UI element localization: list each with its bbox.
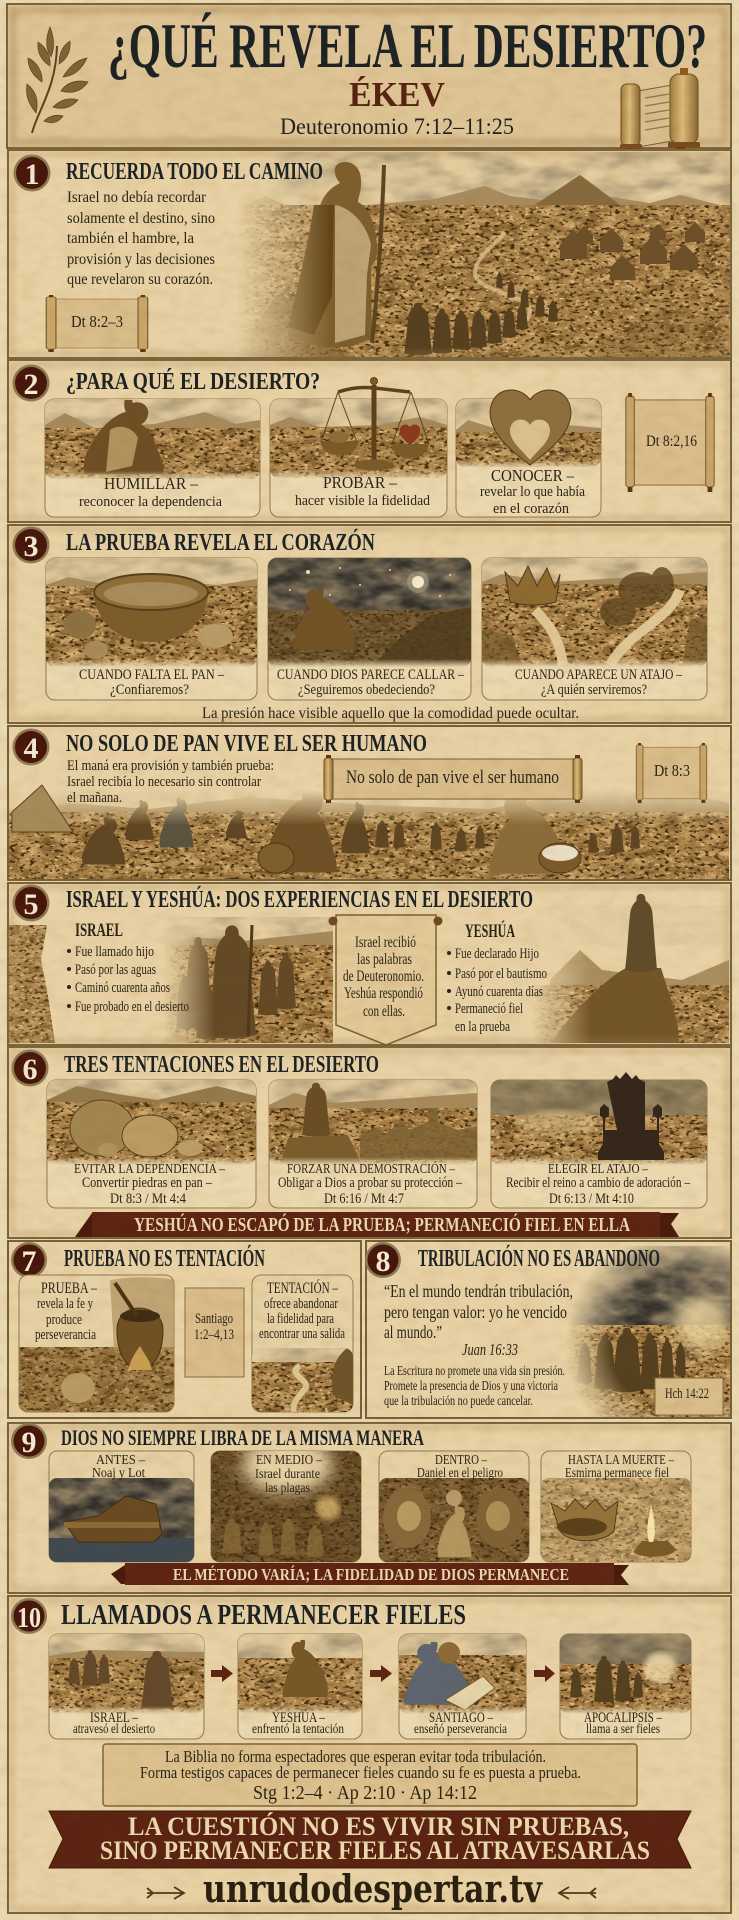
- scroll: Dt 8:2,16: [626, 393, 714, 492]
- list: yeshúa: Ayunó cuarenta días: [455, 984, 543, 1000]
- scroll: Hch 14:22: Hch 14:22: [665, 1386, 709, 1402]
- card: throne: [491, 1072, 707, 1208]
- center banner: de Deuteronomio.: [343, 968, 424, 985]
- card: prueba: perseverancia: [35, 1327, 96, 1343]
- badge 9: 9: [22, 1426, 36, 1459]
- panel 10: llamados a permanecer fieles: [8, 1596, 731, 1913]
- heading: LLAMADOS A PERMANECER FIELES: [61, 1600, 466, 1631]
- list: yeshúa: Pasó por el bautismo: [455, 966, 547, 982]
- card: yeshúa: enfrentó la tentación: [252, 1722, 344, 1737]
- badge 8: 8: [376, 1245, 390, 1278]
- card: probar: hacer visible la fidelidad: [295, 493, 430, 509]
- card: apocalipsis: [560, 1634, 691, 1739]
- center banner: Yeshúa respondió: [344, 985, 423, 1002]
- card: humillar: HUMILLAR –: [104, 474, 198, 493]
- heading: LA PRUEBA REVELA EL CORAZÓN: [66, 528, 375, 556]
- card: tentación: ofrece abandonar: [264, 1296, 338, 1312]
- card: night: [268, 558, 471, 700]
- body text: El maná era provisión y también prueba:: [67, 758, 274, 774]
- list: yeshúa: [447, 920, 547, 1035]
- list: israel: ISRAEL: [75, 920, 123, 941]
- illustration: storm and travellers: [560, 1246, 730, 1417]
- footnote: La presión hace visible aquello que la comodidad puede ocultar.: [202, 705, 579, 722]
- badge 3: [12, 526, 50, 564]
- icon: balance scales: [320, 378, 429, 470]
- card: temple: Obligar a Dios a probar su protección –: [278, 1175, 463, 1191]
- list: israel: Fue llamado hijo: [75, 944, 154, 960]
- card: night: CUANDO DIOS PARECE CALLAR –: [277, 667, 464, 683]
- card: stones: Convertir piedras en pan –: [82, 1175, 213, 1191]
- icon: olive branch: [26, 27, 88, 133]
- heading: ¿PARA QUÉ EL DESIERTO?: [66, 367, 320, 395]
- card: israel: ISRAEL –: [90, 1710, 139, 1726]
- icon: torah scroll: [620, 68, 700, 158]
- card: apocalipsis: APOCALIPSIS –: [584, 1710, 663, 1726]
- list: yeshúa: en la prueba: [455, 1019, 510, 1035]
- illustration: gathering manna: [9, 792, 729, 879]
- body text: Israel no debía recordar: [67, 189, 207, 206]
- illustration: desert journey: [200, 152, 730, 358]
- body text: [67, 189, 215, 288]
- parchment note: Stg 1:2–4 · Ap 2:10 · Ap 14:12: [253, 1782, 477, 1804]
- badge 3: 3: [24, 530, 38, 563]
- card: ark: ANTES –: [96, 1453, 146, 1468]
- website url: unrudodespertar.tv: [203, 1866, 544, 1911]
- body text: [67, 758, 274, 806]
- card: throne: Recibir el reino a cambio de adoración –: [506, 1175, 691, 1191]
- list: israel: Caminó cuarenta años: [75, 980, 170, 996]
- card: israel: atravesó el desierto: [73, 1722, 155, 1737]
- badge 7: 7: [22, 1245, 36, 1278]
- center banner: Israel recibió: [355, 934, 416, 951]
- quote: Juan 16:33: [462, 1340, 518, 1359]
- card: basket: CUANDO FALTA EL PAN –: [79, 667, 224, 683]
- figure: man with staff: [287, 162, 384, 347]
- card: conocer: CONOCER –: [491, 466, 574, 485]
- card: crossroads: CUANDO APARECE UN ATAJO –: [515, 667, 682, 683]
- card: yeshúa: YESHÚA –: [272, 1709, 326, 1726]
- header panel: [7, 4, 731, 158]
- quote: [384, 1281, 573, 1359]
- card: conocer: en el corazón: [493, 501, 569, 517]
- card: plagues: [211, 1437, 361, 1562]
- illustration: yeshúa on the rock: [535, 950, 729, 1043]
- reference line: Deuteronomio 7:12–11:25: [280, 114, 514, 139]
- body text: también el hambre, la: [67, 230, 194, 247]
- card: prueba: [19, 1275, 174, 1412]
- card: stones: Dt 8:3 / Mt 4:4: [110, 1191, 187, 1207]
- quote: “En el mundo tendrán tribulación,: [384, 1281, 573, 1301]
- scroll: Dt 8:2-3: Dt 8:2–3: [71, 312, 123, 331]
- badge 6: 6: [22, 1053, 38, 1086]
- center banner: con ellas.: [363, 1003, 405, 1020]
- parchment note: [103, 1744, 637, 1806]
- card: night: ¿Seguiremos obedeciendo?: [298, 682, 435, 698]
- card: lions: [379, 1451, 529, 1562]
- closing ribbon: [49, 1811, 691, 1868]
- list: israel: Pasó por las aguas: [75, 962, 156, 978]
- badge 10: 10: [17, 1603, 41, 1634]
- badge 5: 5: [24, 888, 38, 921]
- icon: tent: [12, 785, 73, 832]
- card: throne: Dt 6:13 / Mt 4:10: [549, 1191, 634, 1207]
- badge 4: [12, 728, 50, 766]
- card: ark: [49, 1451, 194, 1562]
- figure: woman with basket: [258, 792, 337, 874]
- ribbon: EL MÉTODO VARÍA; LA FIDELIDAD DE DIOS PERMANECE: [173, 1565, 569, 1584]
- card: prueba: revela la fe y: [37, 1296, 94, 1312]
- scroll: Dt 8:3: Dt 8:3: [654, 761, 690, 780]
- panel 2: para qué el desierto: [8, 360, 731, 522]
- scroll banner: [324, 755, 582, 803]
- badge 10: [11, 1598, 47, 1634]
- heading: DIOS NO SIEMPRE LIBRA DE LA MISMA MANERA: [61, 1425, 424, 1450]
- card: israel: [49, 1634, 204, 1739]
- list: israel: Fue probado en el desierto: [75, 999, 189, 1015]
- card: basket: ¿Confiaremos?: [110, 682, 189, 698]
- badge 8: [365, 1242, 401, 1278]
- card: throne: ELEGIR EL ATAJO –: [548, 1162, 649, 1177]
- panel 6: tres tentaciones: [8, 1047, 731, 1238]
- figure: yeshúa: [625, 894, 657, 972]
- scroll: Santiago: Santiago: [195, 1311, 233, 1327]
- panel 9: dios no siempre libra: [8, 1423, 731, 1593]
- card: tentación: encontrar una salida: [259, 1326, 345, 1342]
- note: [384, 1363, 565, 1408]
- card: probar: [270, 378, 447, 517]
- badge 6: [12, 1050, 48, 1086]
- panel 8: tribulación no es abandono: [365, 1241, 731, 1418]
- card: yeshúa: [238, 1634, 362, 1739]
- body text: provisión y las decisiones: [67, 251, 215, 268]
- scroll: Dt 8:3: [636, 743, 707, 803]
- card: stones: [47, 1080, 256, 1208]
- card: santiago: [399, 1634, 526, 1739]
- panel 5: israel y yeshúa: [8, 883, 731, 1045]
- card: crown and lamp: [541, 1451, 691, 1562]
- icon: crown: [505, 566, 560, 605]
- list: yeshúa: Permaneció fiel: [455, 1001, 523, 1017]
- scroll: Santiago: 1:2–4,13: [194, 1327, 234, 1343]
- card: prueba: produce: [46, 1312, 82, 1328]
- card: stones: EVITAR LA DEPENDENCIA –: [74, 1162, 226, 1177]
- card: tentación: [252, 1275, 353, 1412]
- body text: Israel recibía lo necesario sin controlar: [67, 774, 261, 790]
- center banner: [328, 915, 442, 1045]
- scroll: Dt 8:2-3: [46, 295, 148, 352]
- illustration: left cliff: [9, 925, 55, 1043]
- badge 5: [12, 884, 50, 922]
- card: temple: FORZAR UNA DEMOSTRACIÓN –: [287, 1160, 456, 1177]
- body text: solamente el destino, sino: [67, 210, 215, 227]
- heading: PRUEBA NO ES TENTACIÓN: [64, 1244, 265, 1272]
- badge 2: [12, 364, 50, 402]
- badge 9: [11, 1423, 47, 1459]
- closing ribbon: SINO PERMANECER FIELES AL ATRAVESARLAS: [100, 1836, 650, 1865]
- card: crown and lamp: Esmirna permanece fiel: [565, 1466, 669, 1481]
- card: basket: [46, 558, 257, 700]
- parchment note: La Biblia no forma espectadores que esperan evitar toda tribulación.: [165, 1747, 546, 1766]
- arrow: [534, 1665, 555, 1682]
- badge 1: [14, 154, 50, 192]
- scroll banner: No solo de pan vive el ser humano: [346, 767, 559, 788]
- body text: que revelaron su corazón.: [67, 271, 213, 288]
- card: tentación: la fidelidad para: [267, 1311, 334, 1327]
- badge 7: [11, 1242, 47, 1278]
- note: Promete la presencia de Dios y una victoria: [384, 1378, 558, 1393]
- arrow: [370, 1665, 392, 1682]
- card: santiago: enseñó perseverancia: [414, 1722, 508, 1737]
- heading: TRES TENTACIONES EN EL DESIERTO: [64, 1051, 379, 1078]
- card: humillar: [45, 394, 260, 517]
- illustration: israel walking: [163, 917, 333, 1043]
- card: probar: PROBAR –: [323, 473, 397, 492]
- icon: throne: [598, 1072, 664, 1160]
- body text: el mañana.: [67, 790, 122, 806]
- list: israel: [67, 920, 189, 1015]
- card: temple: [269, 1080, 477, 1208]
- note: La Escritura no promete una vida sin presión.: [384, 1363, 565, 1378]
- card: santiago: SANTIAGO –: [429, 1710, 494, 1726]
- card: crown and lamp: HASTA LA MUERTE –: [568, 1453, 675, 1468]
- badge 2: 2: [24, 368, 38, 401]
- panel 7: prueba no es tentación: [8, 1241, 361, 1418]
- figure: man with basket: [489, 800, 582, 874]
- panel 3: la prueba revela el corazón: [8, 525, 731, 723]
- list: yeshúa: YESHÚA: [465, 920, 515, 942]
- panel 1: recuerda todo el camino: [8, 150, 731, 358]
- card: conocer: [456, 390, 601, 517]
- card: temple: Dt 6:16 / Mt 4:7: [324, 1191, 404, 1207]
- scroll: Dt 8:2,16: Dt 8:2,16: [646, 433, 697, 450]
- scroll: Hch 14:22: [655, 1378, 723, 1415]
- scroll: Santiago: [185, 1288, 244, 1377]
- card: plagues: Israel durante: [255, 1467, 320, 1482]
- heading: RECUERDA TODO EL CAMINO: [66, 158, 323, 185]
- note: que la tribulación no puede cancelar.: [384, 1393, 533, 1408]
- list: yeshúa: Fue declarado Hijo: [455, 946, 539, 962]
- card: humillar: reconocer la dependencia: [79, 494, 222, 510]
- arrow: [211, 1665, 233, 1682]
- quote: pero tengan valor: yo he vencido: [384, 1302, 567, 1322]
- center banner: las palabras: [357, 951, 412, 968]
- card: plagues: EN MEDIO –: [256, 1453, 323, 1468]
- panel 4: no solo de pan: [8, 726, 731, 880]
- icon: heart: [490, 390, 571, 465]
- card: tentación: TENTACIÓN –: [267, 1278, 339, 1297]
- closing ribbon: LA CUESTIÓN NO ES VIVIR SIN PRUEBAS,: [128, 1812, 629, 1841]
- card: lions: DENTRO –: [435, 1453, 488, 1468]
- card: prueba: PRUEBA –: [41, 1280, 98, 1297]
- card: lions: Daniel en el peligro: [417, 1466, 503, 1481]
- parchment note: Forma testigos capaces de permanecer fieles cuando su fe es puesta a prueba.: [140, 1763, 581, 1782]
- badge 4: 4: [24, 732, 38, 765]
- quote: al mundo.”: [384, 1322, 442, 1342]
- card: conocer: revelar lo que había: [480, 484, 585, 500]
- heading: NO SOLO DE PAN VIVE EL SER HUMANO: [66, 730, 427, 757]
- heading: ISRAEL Y YESHÚA: DOS EXPERIENCIAS EN EL DESIERTO: [66, 887, 533, 913]
- card: ark: Noaj y Lot: [92, 1466, 145, 1481]
- card: crossroads: ¿A quién serviremos?: [541, 682, 647, 698]
- card: apocalipsis: llama a ser fieles: [586, 1722, 660, 1737]
- card: plagues: las plagas: [265, 1481, 310, 1496]
- badge 1: 1: [24, 158, 40, 191]
- subtitle: Ékev: ÉKEV: [349, 75, 445, 114]
- card: crossroads: [482, 558, 707, 700]
